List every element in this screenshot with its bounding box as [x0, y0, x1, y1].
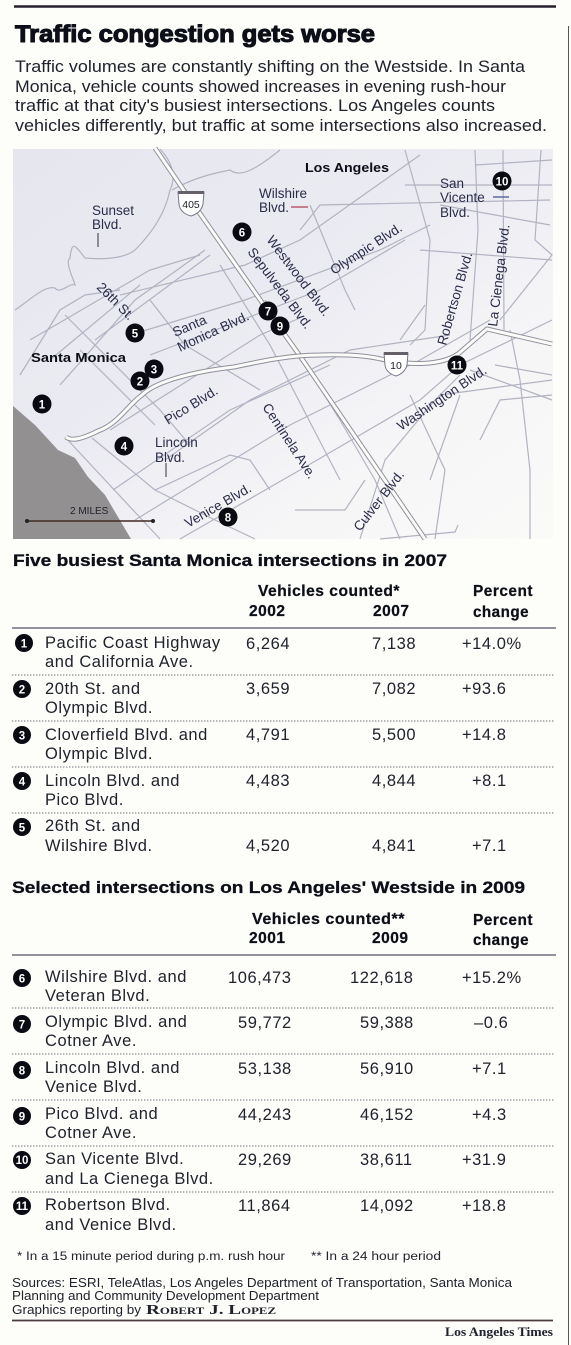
map labels: Sunset [92, 203, 134, 218]
row 11 [13, 1196, 506, 1234]
icon: interstate 10 shield: 10 [390, 360, 402, 372]
footnotes: * In a 15 minute period during p.m. rush hour [17, 1251, 285, 1263]
row 6: 122,618 [350, 969, 414, 987]
table: Santa Monica intersections [12, 583, 556, 855]
row 8: 56,910 [360, 1060, 414, 1078]
map labels: Venice Blvd. [182, 480, 254, 531]
row 3: 3 [19, 730, 25, 742]
intro text block [15, 58, 547, 135]
map markers: 4 [121, 442, 128, 454]
intro text block: Traffic volumes are constantly shifting on the Westside. In Santa [15, 58, 526, 76]
row 10: and La Cienega Blvd. [45, 1170, 214, 1188]
freeway I-405 [155, 148, 425, 539]
sources and credit: Graphics reporting by [12, 1303, 142, 1317]
map labels: Blvd. [259, 200, 289, 215]
row 1: 7,138 [372, 635, 416, 653]
table header [12, 911, 556, 955]
row 6: 106,473 [228, 969, 292, 987]
row 3 [12, 726, 555, 767]
row 6: Wilshire Blvd. and [45, 968, 187, 986]
table header: change [473, 932, 529, 949]
table: Los Angeles intersections [12, 911, 556, 1234]
table header: 2009 [372, 930, 408, 947]
row 2: 3,659 [246, 680, 290, 698]
row 2: 2 [19, 684, 25, 696]
row 7: –0.6 [474, 1014, 508, 1032]
row 5: 4,841 [372, 837, 416, 855]
row 4 [12, 772, 555, 813]
scale bar: 2 miles: 2 MILES [70, 506, 109, 517]
row 11: 14,092 [360, 1197, 414, 1215]
row 10: San Vicente Blvd. [45, 1150, 184, 1168]
map labels: Centinela Ave. [259, 400, 319, 481]
map markers: 2 [137, 376, 143, 388]
row 9: +4.3 [472, 1106, 507, 1124]
map markers: 5 [132, 328, 139, 340]
map labels: Vicente [440, 190, 485, 205]
row 11: +18.8 [462, 1197, 506, 1215]
map markers: 11 [451, 360, 464, 372]
row 4: 4,844 [372, 772, 416, 790]
map labels: Washington Blvd. [394, 363, 489, 433]
map labels: Pico Blvd. [162, 383, 220, 428]
heading: Los Angeles table: Selected intersections on Los Angeles' Westside in 2009 [12, 879, 525, 897]
row 1: and California Ave. [45, 653, 194, 671]
table header [12, 583, 556, 628]
map markers: 6 [239, 228, 245, 240]
row 6: 6 [19, 974, 25, 986]
row 5: 5 [19, 822, 26, 834]
row 4: 4 [19, 776, 26, 788]
map labels: Lincoln [155, 435, 198, 450]
row 5: 26th St. and [45, 817, 141, 835]
footnotes: ** In a 24 hour period [311, 1251, 441, 1263]
row 4: 4,483 [246, 772, 290, 790]
sources and credit: Sources: ESRI, TeleAtlas, Los Angeles Department of Transportation, Santa Monica [12, 1276, 512, 1290]
row 2: 20th St. and [45, 680, 141, 698]
scale bar: 2 miles [25, 506, 155, 523]
row 3: Olympic Blvd. [45, 745, 153, 763]
panel: map [13, 148, 553, 539]
map labels: Olympic Blvd. [327, 220, 405, 278]
street network [15, 149, 552, 539]
table header: 2002 [249, 603, 285, 620]
row 3: Cloverfield Blvd. and [45, 726, 208, 744]
row 10: 38,611 [360, 1151, 413, 1169]
table header: Vehicles counted* [258, 583, 400, 600]
row 5: 4,520 [246, 837, 290, 855]
row 5 [13, 817, 507, 855]
ocean [13, 406, 131, 539]
map labels: Los Angeles [305, 160, 389, 175]
row 9: 9 [19, 1112, 25, 1124]
row 1: 1 [21, 638, 28, 650]
title: Traffic congestion gets worse [15, 21, 375, 48]
sources and credit [12, 1276, 512, 1317]
row 5: Wilshire Blvd. [45, 837, 153, 855]
row 2: 7,082 [372, 680, 416, 698]
map labels: Westwood Blvd. [264, 233, 334, 319]
icon: interstate 405 shield [178, 191, 204, 216]
row 9: 44,243 [238, 1106, 292, 1124]
row 3: +14.8 [462, 726, 506, 744]
map labels: Robertson Blvd. [434, 250, 475, 347]
intro text block: Monica, vehicle counts showed increases in evening rush-hour [15, 78, 507, 96]
row 9: 46,152 [360, 1106, 414, 1124]
map markers: 3 [151, 364, 157, 376]
map labels: La Cienega Blvd. [485, 223, 513, 327]
map labels: Culver Blvd. [351, 467, 407, 534]
row 8 [12, 1059, 555, 1100]
map labels: Monica Blvd. [175, 308, 251, 355]
table header: Percent [473, 583, 533, 600]
freeway I-10 [66, 329, 552, 439]
row 8: 53,138 [238, 1060, 292, 1078]
map labels: Santa [170, 312, 209, 340]
map labels: Blvd. [155, 450, 185, 465]
icon: interstate 10 shield [384, 352, 408, 376]
footnotes [17, 1251, 441, 1263]
row 7: Cotner Ave. [45, 1032, 137, 1050]
row 11: 11 [16, 1201, 29, 1213]
row 2: +93.6 [462, 680, 506, 698]
row 4: Lincoln Blvd. and [45, 772, 180, 790]
table header: 2007 [373, 603, 409, 620]
row 1: 6,264 [246, 635, 290, 653]
row 1 [12, 634, 555, 675]
map labels: Sepulveda Blvd. [245, 245, 315, 332]
row 9: Cotner Ave. [45, 1124, 137, 1142]
row 7: 7 [19, 1020, 25, 1032]
row 7: 59,772 [238, 1014, 292, 1032]
row 1: Pacific Coast Highway [45, 634, 221, 652]
map markers: 1 [39, 400, 46, 412]
row 10: +31.9 [462, 1151, 506, 1169]
row 9 [12, 1105, 555, 1146]
intro text block: vehicles differently, but traffic at some intersections also increased. [15, 117, 547, 135]
row 6: +15.2% [462, 969, 522, 987]
row 6: Veteran Blvd. [45, 987, 150, 1005]
map labels: Wilshire [259, 186, 307, 201]
credit: Los Angeles Times: Los Angeles Times [445, 1325, 553, 1339]
row 8: Lincoln Blvd. and [45, 1059, 180, 1077]
map labels: San [440, 176, 464, 191]
intro text block: traffic at that city's busiest intersections. Los Angeles counts [15, 97, 495, 115]
table header: change [473, 604, 529, 621]
row 11: and Venice Blvd. [45, 1216, 177, 1234]
row 4: +8.1 [472, 772, 507, 790]
row 8: +7.1 [472, 1060, 507, 1078]
sources and credit: Robert J. Lopez [146, 1302, 276, 1317]
map labels [31, 160, 513, 534]
row 3: 4,791 [246, 726, 290, 744]
row 1: +14.0% [462, 635, 522, 653]
sources and credit: Planning and Community Development Department [12, 1289, 320, 1303]
map markers: 10 [496, 176, 508, 188]
map markers: 7 [265, 306, 271, 318]
row 8: 8 [19, 1066, 26, 1078]
map markers [32, 172, 512, 526]
map markers: 9 [277, 322, 283, 334]
heading: Santa Monica table: Five busiest Santa Monica intersections in 2007 [13, 552, 447, 570]
table header: Vehicles counted** [252, 911, 405, 928]
row 2: Olympic Blvd. [45, 699, 153, 717]
row 4: Pico Blvd. [45, 791, 124, 809]
row 10: 10 [16, 1155, 28, 1167]
table header: Percent [473, 912, 533, 929]
row 10 [12, 1150, 555, 1192]
map labels: Santa Monica [31, 350, 127, 365]
map labels: Blvd. [92, 217, 122, 232]
row 7 [12, 1013, 555, 1054]
table header: 2001 [249, 930, 285, 947]
row 11: 11,864 [238, 1197, 291, 1215]
row 7: Olympic Blvd. and [45, 1013, 187, 1031]
row 6 [12, 968, 555, 1008]
row 7: 59,388 [360, 1014, 414, 1032]
row 5: +7.1 [472, 837, 507, 855]
row 8: Venice Blvd. [45, 1078, 142, 1096]
map markers: 8 [225, 512, 232, 524]
row 10: 29,269 [238, 1151, 292, 1169]
row 11: Robertson Blvd. [45, 1196, 171, 1214]
icon: interstate 405 shield: 405 [182, 199, 200, 211]
map labels: Blvd. [440, 205, 470, 220]
row 2 [12, 680, 555, 721]
map labels: 26th St. [94, 280, 137, 323]
row 9: Pico Blvd. and [45, 1105, 158, 1123]
row 3: 5,500 [372, 726, 416, 744]
